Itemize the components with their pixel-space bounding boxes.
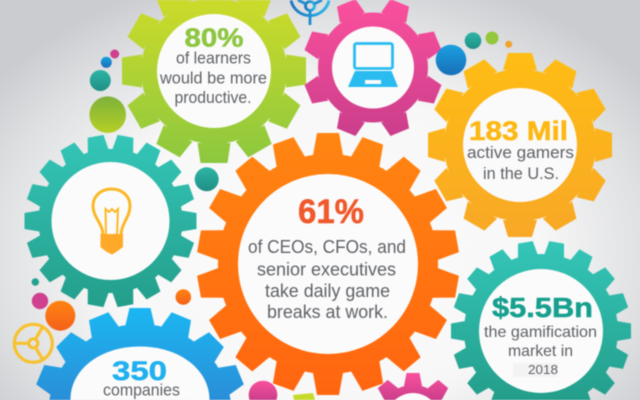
- stat: 61%: 61%: [298, 193, 364, 231]
- text: active gamers in the U.S.: in the U.S.: [483, 165, 559, 183]
- gear: 61% of executives: [197, 133, 459, 395]
- text: of CEOs, CFOs, and senior executives take daily game breaks at work.: breaks at work.: [267, 302, 388, 322]
- gear: 80% of learners: [122, 0, 306, 163]
- gear: $5.5Bn gamification market: [451, 241, 631, 400]
- stat: 350: 350: [112, 356, 167, 386]
- text: active gamers in the U.S.: [467, 144, 574, 183]
- text: the gamification market in 2018: [484, 324, 597, 377]
- text: of CEOs, CFOs, and senior executives take daily game breaks at work.: take daily game: [265, 281, 390, 301]
- stat: $5.5Bn: $5.5Bn: [492, 292, 593, 323]
- text: of CEOs, CFOs, and senior executives take daily game breaks at work.: [248, 237, 406, 322]
- text: of CEOs, CFOs, and senior executives take daily game breaks at work.: senior executives: [257, 260, 396, 280]
- green shape at bottom: [293, 393, 315, 400]
- gear: laptop: [303, 0, 443, 138]
- text: the gamification market in 2018: market in: [508, 343, 573, 360]
- gear: small pink at bottom: [377, 372, 449, 400]
- dot: orange: [176, 289, 191, 305]
- gear: 183 Mil active gamers: [428, 53, 612, 237]
- icon: blue wheel: [291, 0, 329, 25]
- decorative dots: top-right cluster: [436, 32, 512, 75]
- text: of learners would be more productive.: of learners: [176, 50, 251, 68]
- dot: magenta at bottom: [249, 381, 277, 400]
- text: active gamers in the U.S.: active gamers: [467, 144, 574, 162]
- text: the gamification market in 2018: the gamification: [484, 324, 597, 341]
- text: companies: companies: [103, 380, 180, 400]
- text: of learners would be more productive.: [159, 50, 267, 107]
- decorative dots: lower-left cluster: [32, 278, 75, 331]
- icon: yellow wheel: [14, 324, 52, 362]
- text: of learners would be more productive.: productive.: [174, 89, 252, 107]
- stat: 183 Mil: 183 Mil: [469, 116, 568, 146]
- gear: 350 companies: [32, 308, 248, 400]
- gear: lightbulb: [24, 135, 197, 307]
- text: of learners would be more productive.: would be more: [159, 70, 267, 88]
- dot: teal between gears: [195, 167, 219, 191]
- icon: lightbulb: [93, 189, 130, 254]
- text: the gamification market in 2018: 2018: [528, 362, 558, 377]
- stat: 80%: 80%: [184, 22, 244, 52]
- icon: laptop: [348, 44, 398, 87]
- text: of CEOs, CFOs, and senior executives take daily game breaks at work.: of CEOs, CFOs, and: [248, 237, 406, 257]
- decorative dots: top-left cluster: [89, 50, 126, 133]
